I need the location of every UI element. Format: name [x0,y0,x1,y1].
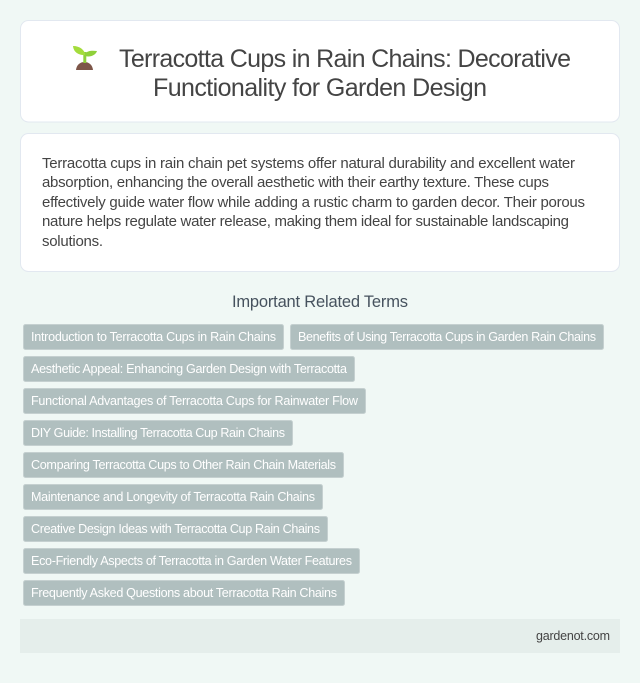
tag: functional advantages [24,388,366,414]
tag: eco-friendly [24,548,360,574]
tag: introduction [24,324,284,350]
tag: diy guide: DIY Guide: Installing Terracotta Cup Rain Chains [31,426,285,440]
tag: maintenance: Maintenance and Longevity of Terracotta Rain Chains [31,490,315,504]
tag: aesthetic appeal: Aesthetic Appeal: Enhancing Garden Design with Terracotta [31,362,347,376]
tag: faq: Frequently Asked Questions about Terracotta Rain Chains [31,586,337,600]
tag: benefits [290,324,604,350]
description text: solutions. [42,233,103,250]
title text [119,45,571,102]
tag: functional advantages: Functional Advantages of Terracotta Cups for Rainwater Flow [31,394,359,408]
description text: Terracotta cups in rain chain pet systems offer natural durability and excellent water [42,155,575,172]
heading: important related terms: Important Related Terms [232,293,408,311]
description text [42,155,585,250]
tag: creative design: Creative Design Ideas with Terracotta Cup Rain Chains [31,522,320,536]
description text: absorption, enhancing the overall aesthetic with their earthy texture. These cups [42,174,549,191]
panel: description [20,134,620,272]
tag: maintenance [24,484,322,510]
description text: effectively guide water flow while adding a rustic charm to garden decor. Their porous [42,194,585,211]
title text: Functionality for Garden Design [153,74,487,102]
tag: faq [24,580,344,606]
tag: diy guide [24,420,292,446]
tag list [24,324,604,606]
tag: introduction: Introduction to Terracotta Cups in Rain Chains [31,330,276,344]
footer [20,619,620,653]
tag: eco-friendly: Eco-Friendly Aspects of Terracotta in Garden Water Features [31,554,352,568]
tag: aesthetic appeal [24,356,354,382]
tag: comparing [24,452,344,478]
tag: comparing: Comparing Terracotta Cups to Other Rain Chain Materials [31,458,336,472]
icon: seedling [73,46,97,70]
title text: Terracotta Cups in Rain Chains: Decorative [119,45,571,73]
description text: nature helps regulate water release, making them ideal for sustainable landscaping [42,213,569,230]
footer: gardenot.com [536,629,610,643]
tag: creative design [24,516,328,542]
title card [20,20,620,122]
tag: benefits: Benefits of Using Terracotta Cups in Garden Rain Chains [298,330,596,344]
